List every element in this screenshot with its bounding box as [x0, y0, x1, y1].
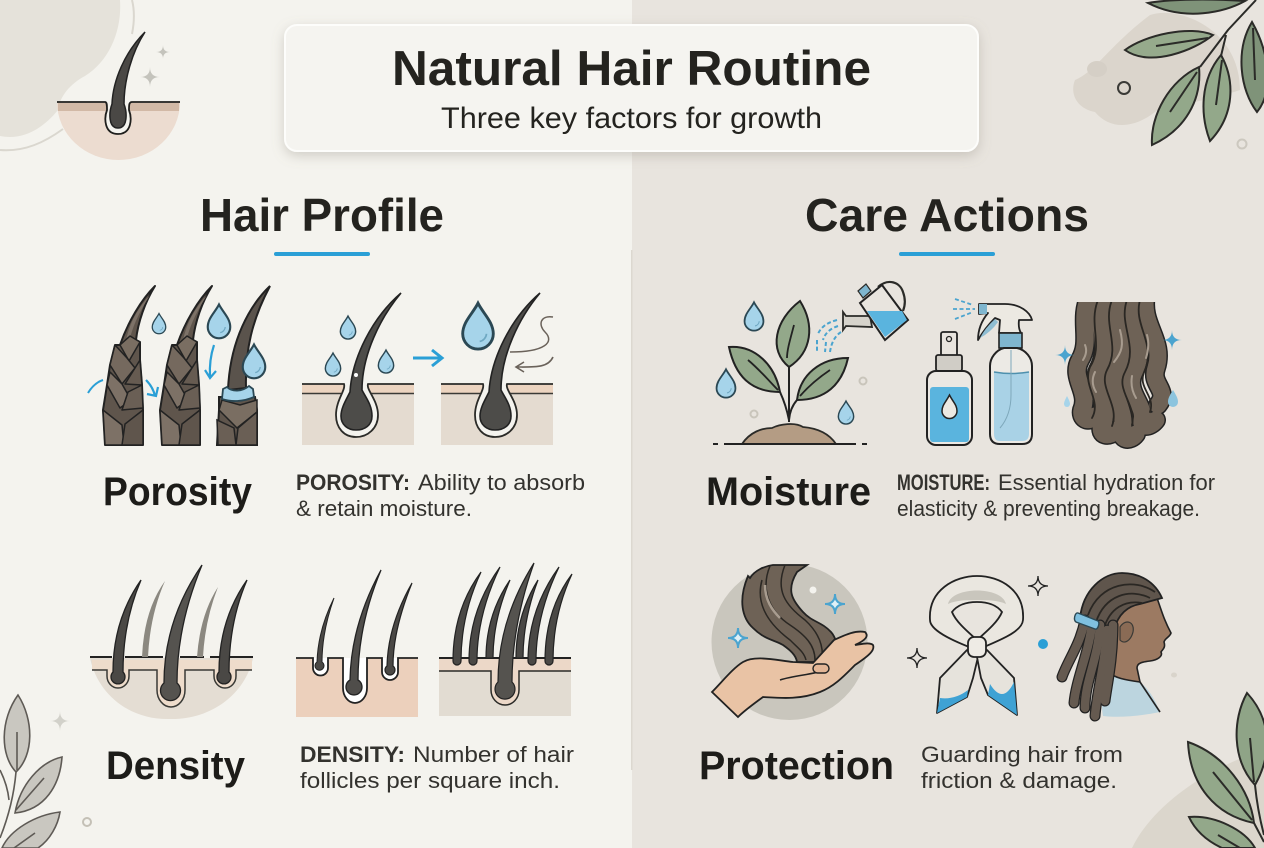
illustration: hair resting in hand	[712, 564, 873, 720]
heading: Hair Profile: Hair Profile	[200, 189, 444, 241]
illustration: spray bottles	[927, 299, 1032, 445]
illustration: low density follicles	[296, 570, 418, 717]
illustration: plant with watering can	[713, 282, 908, 444]
illustration: moisture absorption follicle, before	[302, 293, 414, 445]
text: porosity description	[296, 470, 585, 521]
decoration: bottom-right leaves	[1132, 693, 1264, 848]
illustration: scarf	[907, 576, 1048, 715]
text: moisture description: Essential hydration for	[998, 470, 1215, 495]
text: moisture description: MOISTURE:	[897, 470, 990, 495]
illustration: moisture retention follicle, after	[441, 293, 553, 445]
third strand with sealed cuticle	[217, 286, 270, 445]
subtitle: Three key factors for growth	[441, 102, 822, 135]
decoration: top-left blob	[0, 0, 134, 150]
text: density description: follicles per square inch.	[300, 768, 560, 793]
hair dome	[1080, 573, 1162, 640]
title: Natural Hair Routine	[392, 42, 871, 96]
text: protection description	[921, 742, 1123, 793]
decoration: bottom-left leaves	[0, 695, 91, 848]
text: porosity description: POROSITY:	[296, 470, 410, 495]
text: density description: DENSITY:	[300, 742, 405, 767]
large spray bottle	[953, 299, 1032, 444]
text: moisture description	[897, 470, 1215, 521]
icon: follicle logo	[57, 32, 180, 160]
illustration: density scalp	[90, 565, 253, 719]
title panel	[285, 25, 978, 151]
text: protection description: Guarding hair from	[921, 742, 1123, 767]
text: density description: Number of hair	[413, 742, 574, 767]
text: moisture description: elasticity & preventing breakage.	[897, 496, 1200, 521]
label: Density: Density	[106, 744, 246, 788]
small spray bottle	[927, 332, 972, 445]
arrow	[413, 350, 442, 366]
illustration: porosity hair strands	[88, 286, 270, 445]
illustration: wavy hair	[1055, 295, 1182, 439]
heading: Care Actions: Care Actions	[805, 189, 1089, 241]
illustration: high density follicles	[439, 563, 572, 716]
text: porosity description: Ability to absorb	[418, 470, 585, 495]
text: porosity description: & retain moisture.	[296, 496, 472, 521]
illustration: head with protective locs	[1062, 573, 1177, 717]
label: Moisture: Moisture	[706, 470, 871, 514]
label: Porosity: Porosity	[103, 470, 253, 514]
decoration: top-right leaves	[1073, 0, 1264, 149]
watering can	[817, 282, 908, 352]
text: protection description: friction & damage.	[921, 768, 1117, 793]
text: density description	[300, 742, 574, 793]
label: Protection: Protection	[699, 744, 894, 788]
